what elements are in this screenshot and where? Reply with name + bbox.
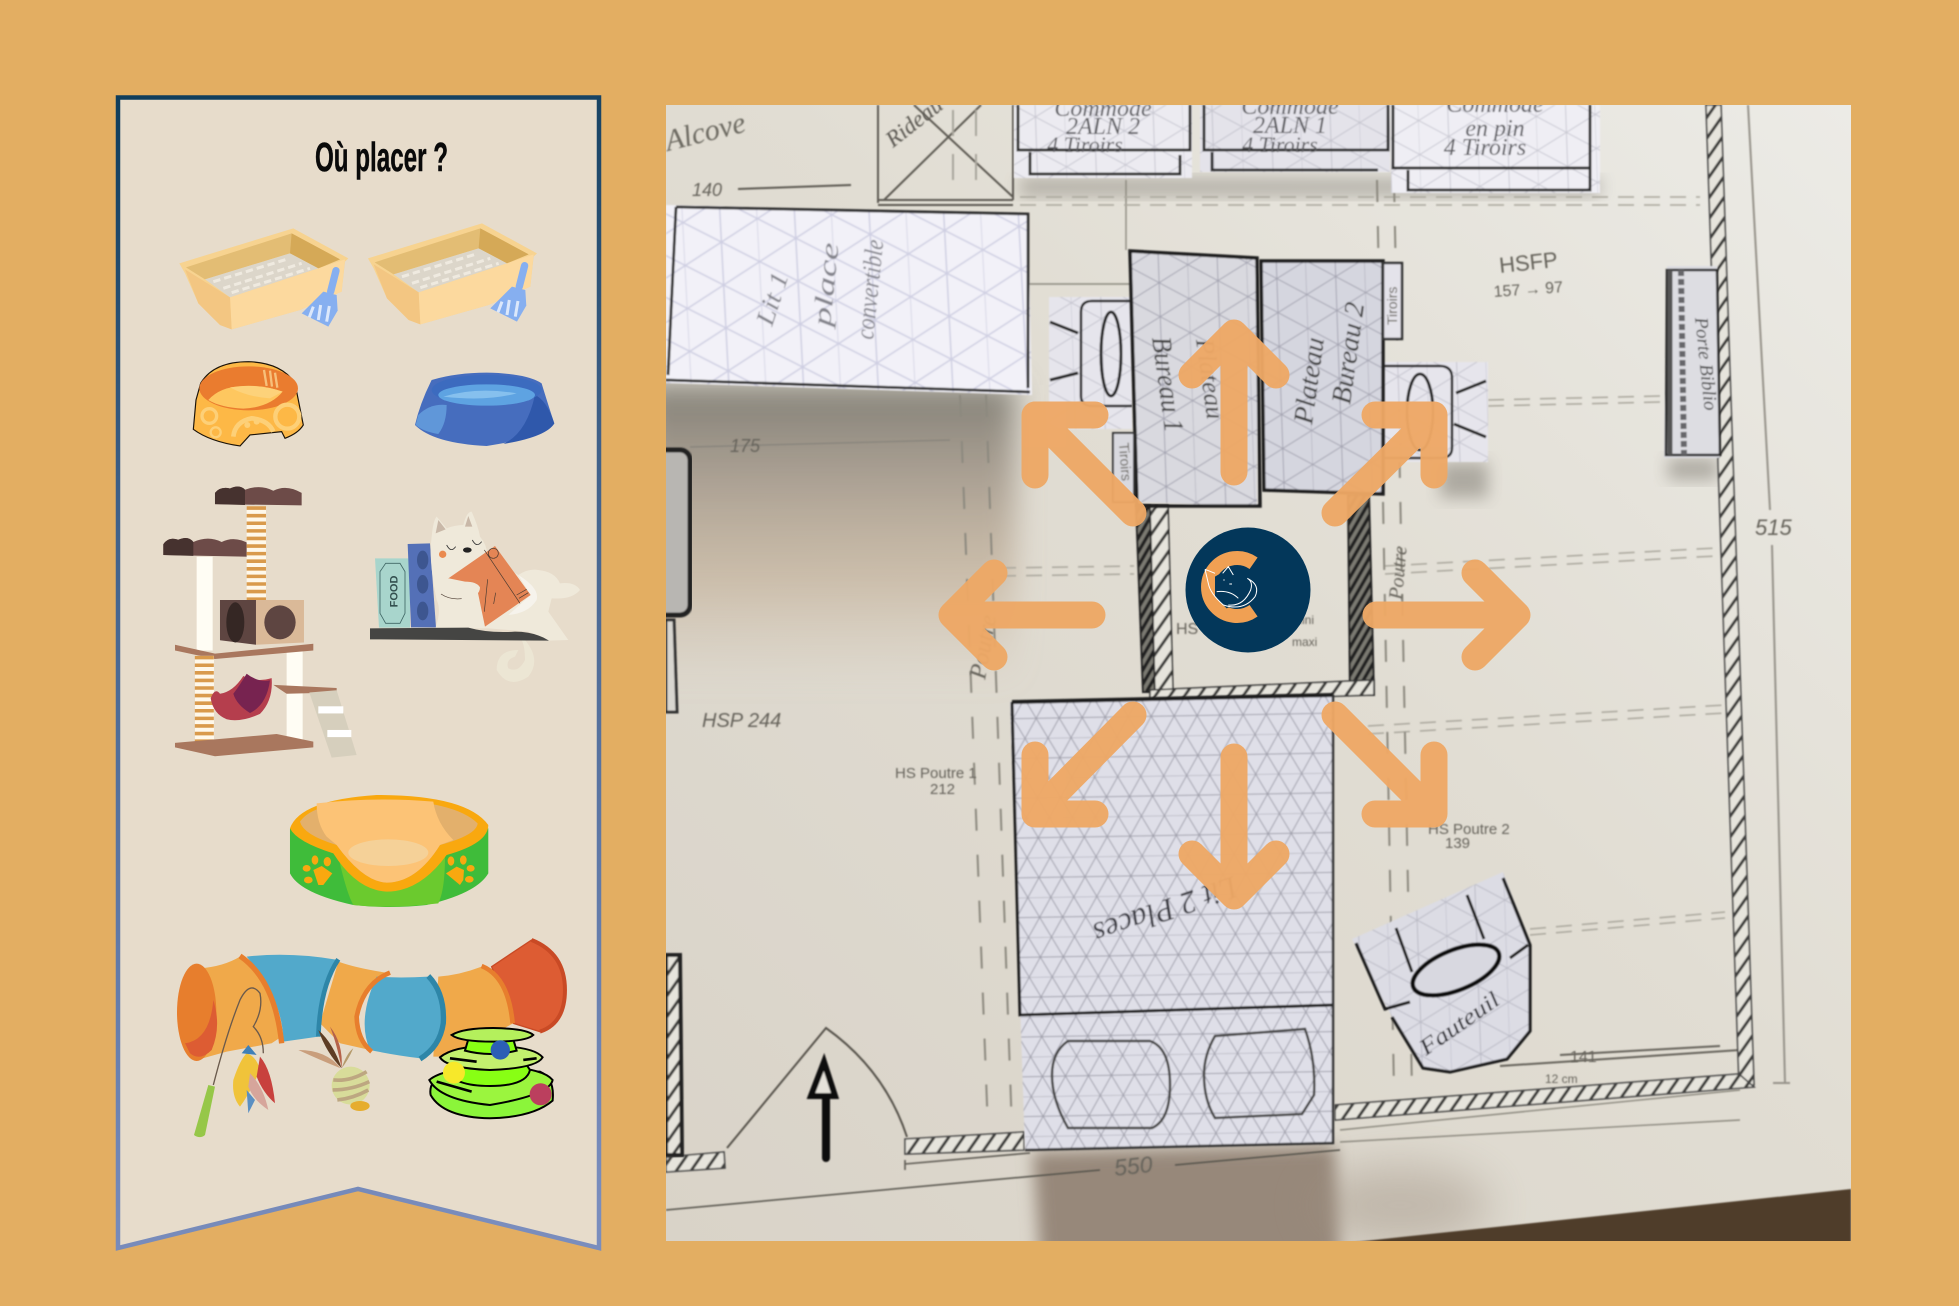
- plan annotations: 139: [1445, 835, 1470, 852]
- paper: desk 2: Tiroirs: [1384, 287, 1400, 325]
- paper: armchair: Fauteuil: [1414, 987, 1504, 1061]
- paper: chests of drawers: [1013, 105, 1600, 194]
- door with north arrow: [727, 1028, 907, 1158]
- arrow: right: [1376, 573, 1517, 657]
- plan annotations: maxi: [1292, 635, 1317, 649]
- paper: folding bed: Lit 1: [750, 269, 794, 330]
- plan annotations: 515: [1755, 515, 1792, 540]
- paper: folding bed: convertible: [850, 238, 889, 341]
- paper base: [666, 105, 1851, 1241]
- paper: double bed: Lit 2 Places: [1089, 869, 1243, 952]
- plan annotations: HS Poutre 1: [895, 765, 977, 782]
- arrow: down: [1192, 757, 1276, 896]
- plan annotations: 12 cm: [1545, 1072, 1578, 1086]
- drawn plan lines: [666, 105, 1790, 1210]
- plan annotations: HS Poutre 2: [1428, 821, 1510, 838]
- paper: desk 2: [1261, 261, 1402, 494]
- paper: double bed: [1010, 695, 1333, 1150]
- paper: desk 2: Bureau 2: [1326, 300, 1371, 406]
- logo cat: [1205, 567, 1257, 608]
- icon: litter box 2: [368, 223, 537, 324]
- paper: chests of drawers: Commode: [1054, 96, 1152, 122]
- banner shape: [118, 98, 599, 1248]
- logo letter C: [1208, 558, 1254, 616]
- paper: desk 1: Tiroirs: [1116, 442, 1135, 481]
- icon: litter box 1: [179, 228, 348, 329]
- plan annotations: HSP 244: [702, 710, 781, 732]
- plan annotations: 212: [930, 781, 955, 798]
- paper: folding bed: [666, 205, 1032, 395]
- left furniture edge: [666, 446, 692, 1158]
- paper: bookshelf: [1664, 266, 1721, 458]
- paper: right chair: [1383, 362, 1488, 462]
- panel: bookmark banner: [118, 98, 599, 1248]
- plan annotations: Poutre: [965, 613, 1002, 682]
- arrow: down left: [1035, 715, 1133, 814]
- paper: chests of drawers: Commode: [1446, 92, 1544, 118]
- panel: floor plan photo: [640, 92, 1851, 1260]
- paper: left chair: [1049, 297, 1132, 429]
- icon: ball toy with feathers: [298, 1027, 370, 1111]
- arrow: down right: [1335, 715, 1434, 814]
- paper: desk 1: Plateau: [1190, 336, 1230, 421]
- paper: chests of drawers: 4 Tiroirs: [1242, 132, 1318, 157]
- plan annotations: 141: [1570, 1049, 1597, 1066]
- logo: [1186, 528, 1310, 652]
- arrows: [952, 333, 1517, 896]
- shadows on paper: [640, 178, 1718, 1260]
- plan annotations: mini: [1292, 613, 1314, 627]
- arrow: up: [1192, 333, 1276, 472]
- icon: cat tree: [163, 487, 357, 758]
- icon: cat reading on shelf: [370, 512, 580, 682]
- plan annotations: HSFP: [1498, 247, 1559, 278]
- paper: chests of drawers: 2ALN 2: [1066, 114, 1140, 140]
- icon: feather wand toy: [194, 988, 275, 1137]
- arrow: up left: [1035, 415, 1133, 513]
- paper: chests of drawers: en pin: [1465, 116, 1525, 142]
- logo disc: [1186, 528, 1310, 652]
- icon: green track toy: [429, 1028, 553, 1118]
- paper: desk 2: Plateau: [1288, 335, 1331, 427]
- paper: desk 1: [1113, 251, 1260, 506]
- walls: [666, 105, 1754, 1172]
- icon: cat bed: [290, 795, 488, 907]
- plan annotations: [660, 92, 1792, 1181]
- icon group: litter boxes and bowls: [179, 223, 554, 446]
- icon: play tunnel: [177, 940, 565, 1061]
- title: Où placer ?: [315, 134, 448, 180]
- plan annotations: 157 → 97: [1493, 279, 1564, 301]
- plan annotations: 175: [730, 436, 761, 456]
- paper: desk 1: Bureau 1: [1145, 335, 1189, 434]
- paper: folding bed: place: [807, 241, 845, 331]
- plan annotations: 140: [692, 180, 722, 200]
- paper: chests of drawers: 2ALN 1: [1253, 113, 1327, 139]
- icon group: lower clip art: [177, 795, 565, 1137]
- plan annotations: Rideau: [880, 92, 947, 153]
- table corner: [1355, 1188, 1851, 1241]
- arrow: left: [952, 573, 1092, 657]
- paper: chests of drawers: 4 Tiroirs: [1444, 135, 1526, 161]
- plan annotations: Poutre: [1385, 545, 1412, 601]
- paper: armchair: [1352, 872, 1530, 1072]
- arrow: up right: [1335, 415, 1434, 513]
- paper: chests of drawers: 4 Tiroirs: [1047, 132, 1123, 157]
- icon: cat reading on shelf: FOOD: [388, 576, 400, 607]
- plan annotations: HS: [1176, 621, 1198, 638]
- plan annotations: Alcove: [660, 106, 749, 158]
- icon: blue water bowl: [415, 373, 554, 446]
- paper: chests of drawers: Commode: [1241, 94, 1339, 120]
- paper: bookshelf: Porte Biblio: [1690, 315, 1721, 411]
- plan annotations: 550: [1113, 1151, 1154, 1181]
- icon: orange food bowl: [193, 362, 303, 446]
